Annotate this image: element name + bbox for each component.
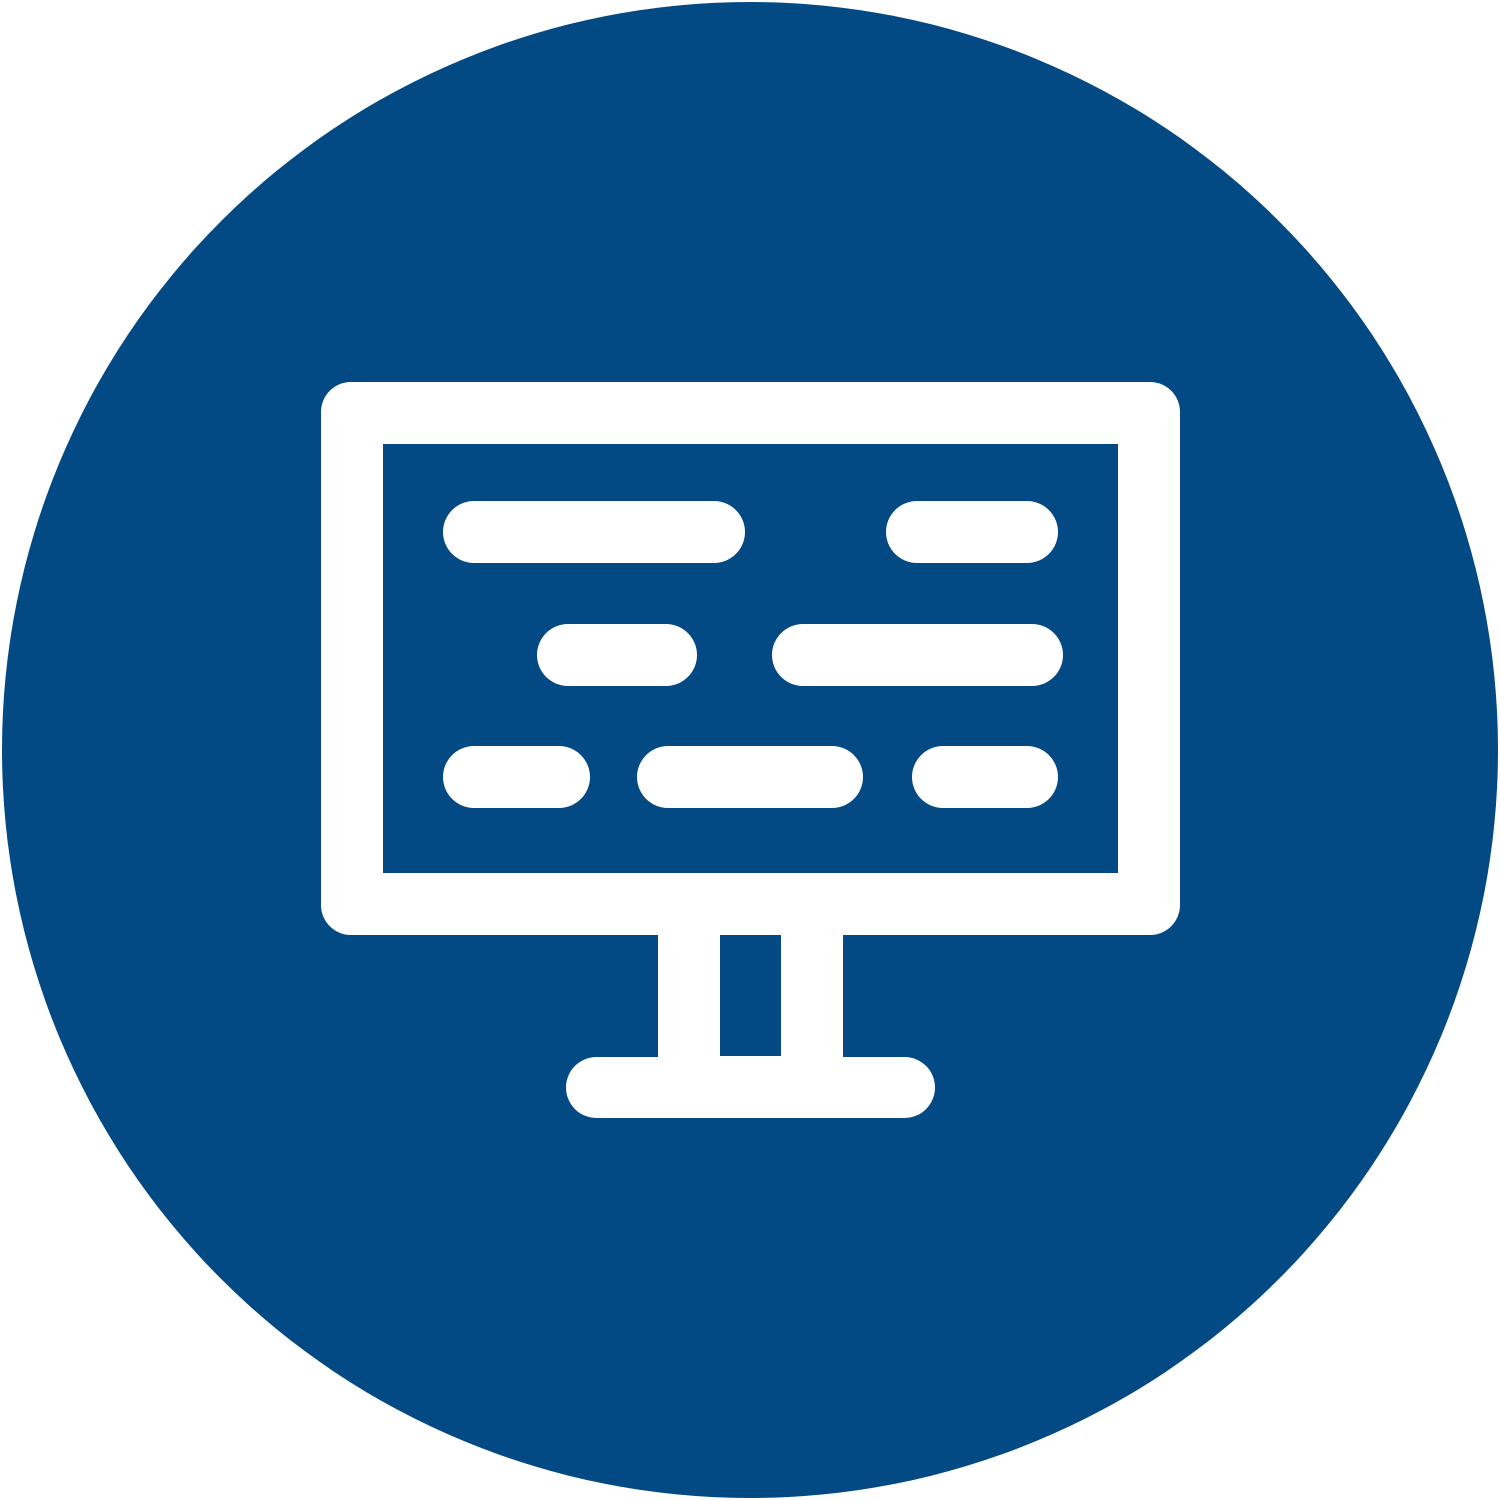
- screen text lines: [443, 501, 1063, 808]
- monitor: [321, 382, 1180, 1118]
